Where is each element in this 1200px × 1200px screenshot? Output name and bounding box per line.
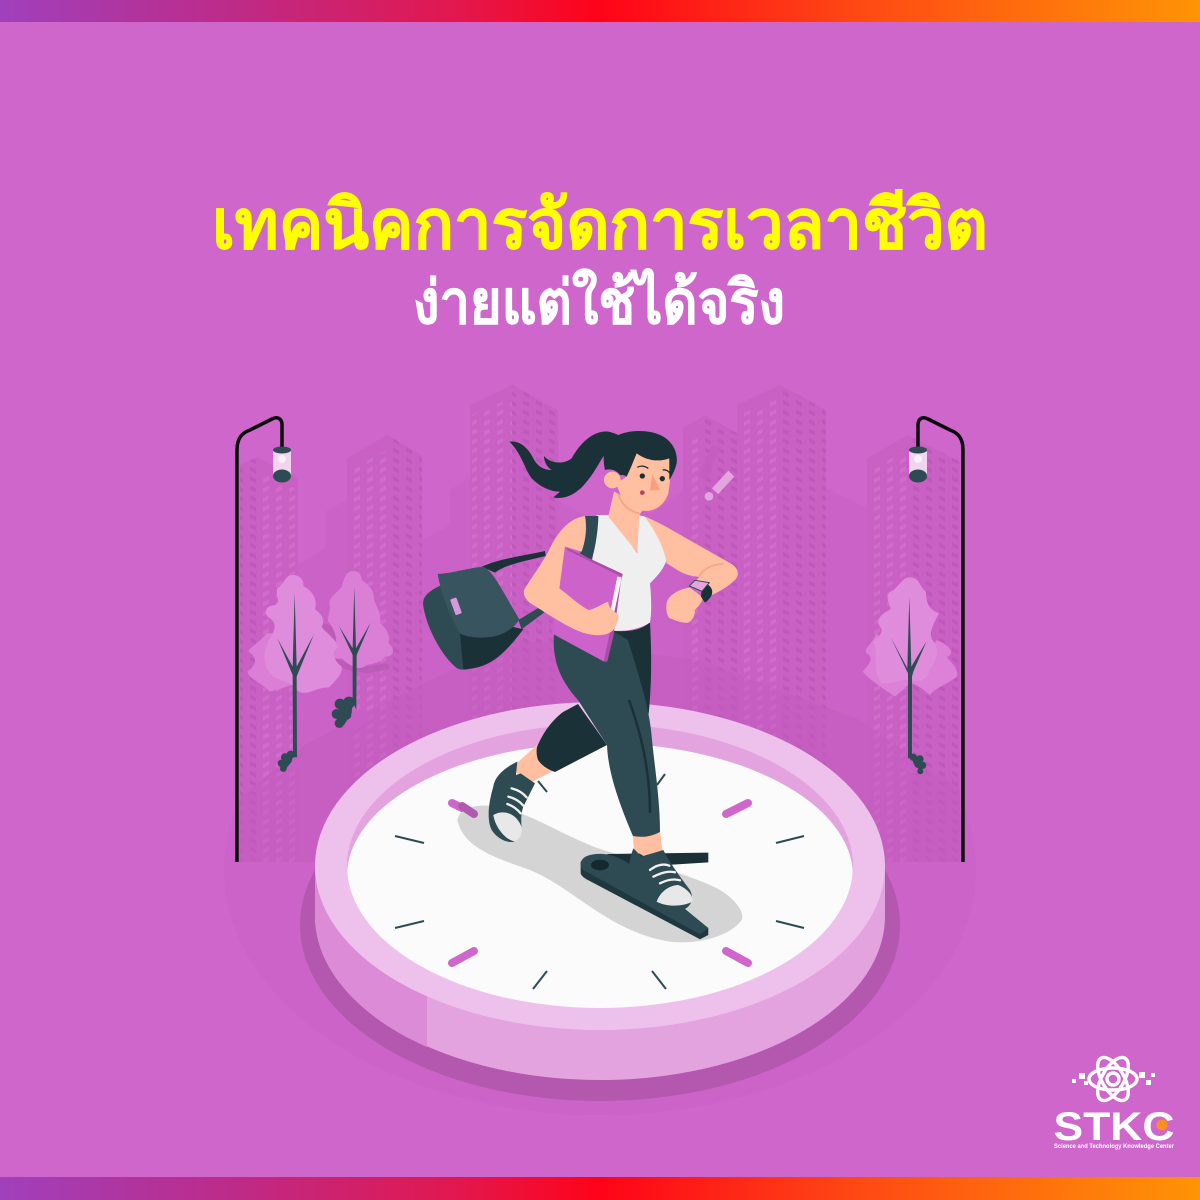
holding arm (524, 516, 619, 635)
hour ticks (395, 774, 804, 989)
pixel squares (1072, 1072, 1155, 1085)
runner woman (423, 431, 738, 911)
wrist crease (698, 564, 723, 577)
handbag (423, 551, 546, 670)
atom emblem (1089, 1053, 1137, 1105)
back leg (537, 704, 607, 772)
neck shadow (618, 494, 639, 513)
back of hips (613, 622, 651, 770)
clock side wall darker left (315, 866, 427, 1047)
clock recess wall (347, 724, 853, 1008)
tree right (863, 577, 957, 774)
book (552, 547, 623, 662)
ear (604, 472, 621, 488)
neck and chest (608, 492, 645, 553)
logo tagline: Science and Technology Knowledge Center (1054, 1144, 1175, 1150)
white top (587, 515, 667, 631)
clock (300, 702, 900, 1101)
fist (666, 588, 702, 623)
shoulder strap (580, 516, 598, 560)
ground glow under clock (224, 625, 976, 1115)
bottom gradient bar (0, 1177, 1200, 1200)
wristwatch (701, 583, 712, 603)
ponytail (509, 432, 618, 498)
clock hand (581, 853, 708, 939)
eyes and brows (637, 466, 670, 481)
face (617, 450, 671, 511)
runner shadow (457, 805, 742, 942)
mouth (640, 490, 645, 495)
faint exclamation shadow (698, 445, 720, 480)
subtitle: ง่ายแต่ใช้ได้จริง (413, 267, 785, 336)
clock rim (315, 702, 885, 1030)
lamp post right (909, 418, 963, 862)
upper body (509, 431, 738, 662)
lamp post left (237, 418, 291, 862)
tree left back (321, 571, 393, 729)
leg crease (629, 700, 650, 813)
back shoe (489, 762, 535, 842)
front leg (554, 631, 660, 837)
clock face (347, 743, 853, 1009)
front ankle (633, 830, 662, 856)
front shoe (629, 848, 692, 911)
raised arm (645, 517, 738, 595)
city skyline background (238, 385, 960, 862)
STKC logo (1054, 1053, 1175, 1150)
mark overlap on shadow (462, 806, 474, 814)
back calf (516, 745, 553, 783)
clock drop shadow (300, 749, 900, 1101)
tree left front (247, 575, 342, 772)
top gradient bar (0, 0, 1200, 22)
title: เทคนิคการจัดการเวลาชีวิต (212, 187, 988, 263)
exclamation mark (705, 471, 734, 501)
orange dot (1156, 1120, 1168, 1130)
clock side wall (315, 866, 885, 1080)
STKC wordmark: STKC (1054, 1105, 1174, 1149)
hair (604, 431, 677, 480)
quarter marks (452, 803, 748, 963)
nose (650, 474, 660, 491)
